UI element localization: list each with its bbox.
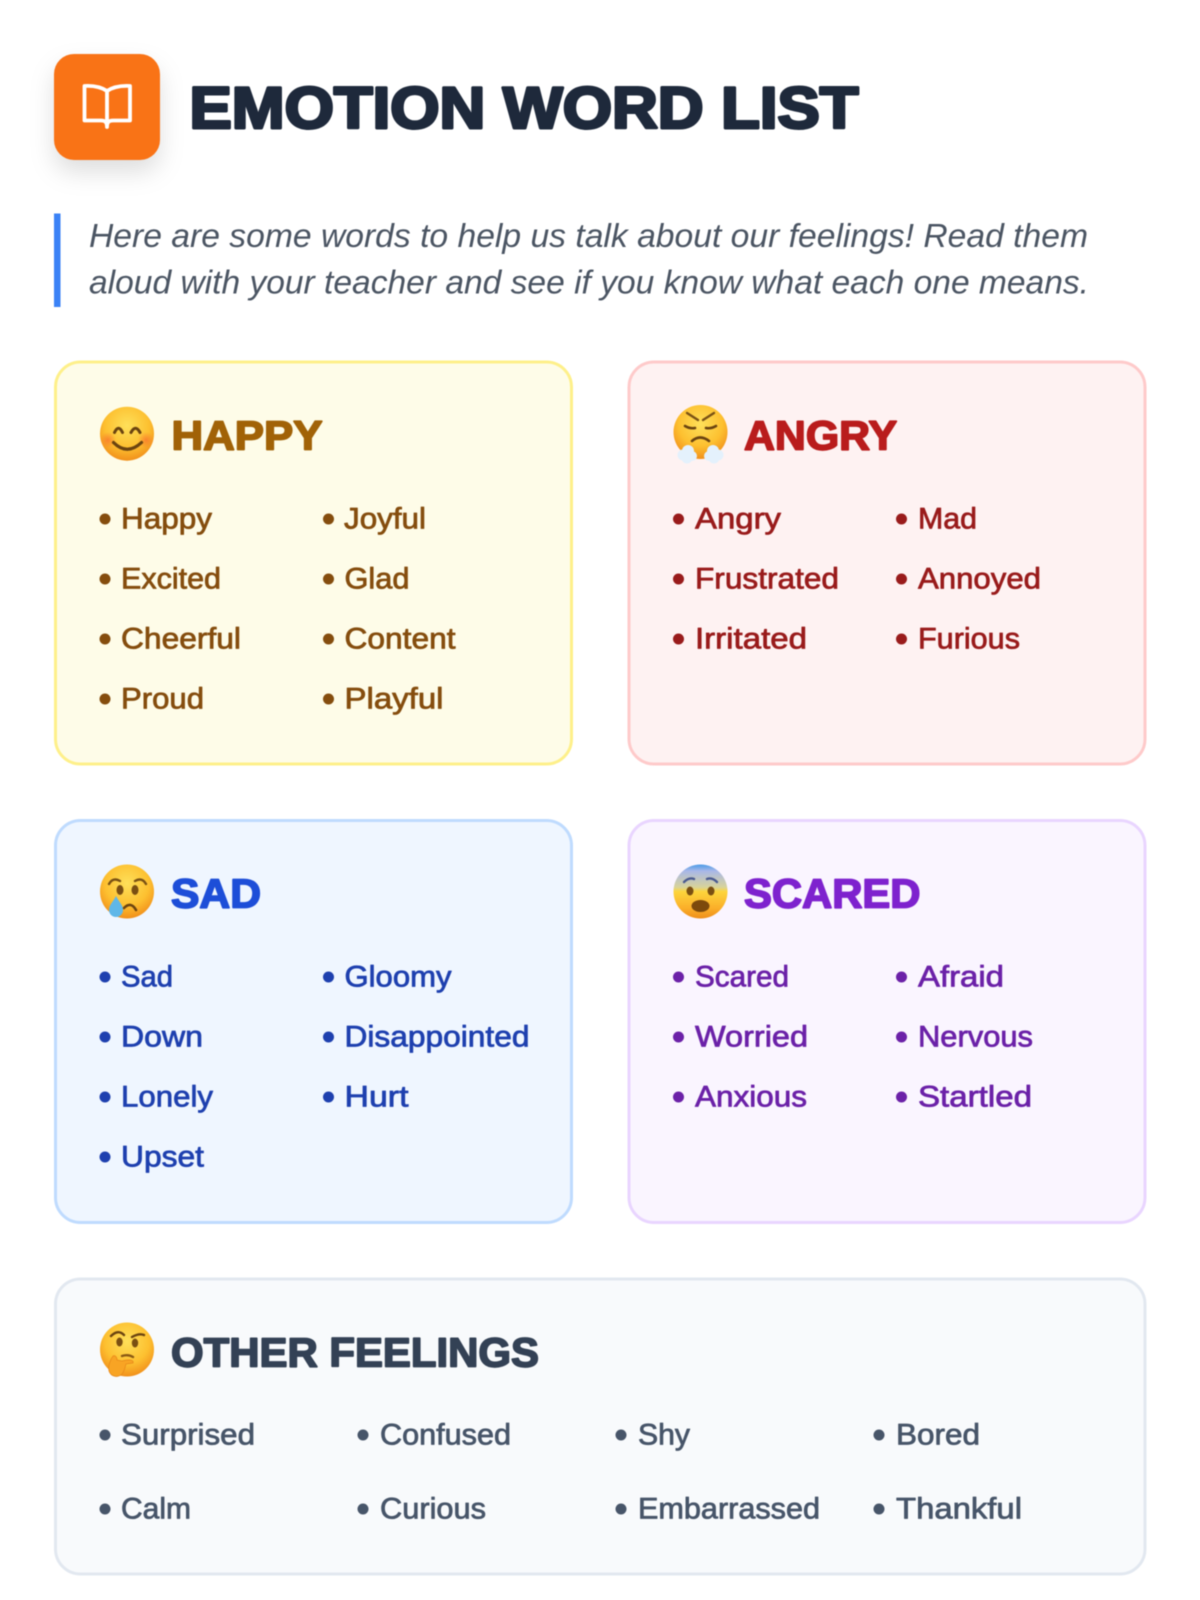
panel: happy bbox=[56, 362, 572, 764]
heading: other feelings: OTHER FEELINGS bbox=[171, 1330, 539, 1376]
word list: other feelings: Bored bbox=[896, 1418, 980, 1452]
icon: crying face emoji bbox=[100, 864, 154, 918]
word list: other feelings: Curious bbox=[380, 1492, 486, 1526]
panel: sad bbox=[56, 820, 572, 1222]
word list: happy: Cheerful bbox=[121, 622, 241, 656]
word list: angry: Angry bbox=[695, 502, 781, 536]
intro text block: Here are some words to help us talk about our feelings! Read them bbox=[89, 218, 1088, 255]
word list: angry: Furious bbox=[918, 622, 1020, 656]
panel: other feelings bbox=[56, 1279, 1145, 1574]
word list: happy: Joyful bbox=[344, 502, 426, 536]
word list: scared: Afraid bbox=[918, 960, 1004, 994]
panel: scared bbox=[629, 820, 1145, 1222]
word list: angry: Frustrated bbox=[695, 562, 839, 596]
icon: open book badge bbox=[54, 54, 160, 160]
title: EMOTION WORD LIST bbox=[190, 76, 858, 141]
word list: happy: Glad bbox=[344, 562, 410, 596]
word list: angry: Annoyed bbox=[918, 562, 1041, 596]
word list: other feelings: Embarrassed bbox=[638, 1492, 820, 1526]
word list: sad: Upset bbox=[121, 1140, 204, 1174]
word list: other feelings: Calm bbox=[121, 1492, 191, 1526]
word list: sad: Down bbox=[121, 1020, 203, 1054]
heading: scared: SCARED bbox=[744, 870, 920, 916]
word list: scared: Scared bbox=[695, 960, 789, 994]
heading: angry: ANGRY bbox=[744, 412, 897, 458]
word list: happy: Excited bbox=[121, 562, 221, 596]
word list: happy: Proud bbox=[121, 682, 204, 716]
word list: other feelings: Shy bbox=[638, 1418, 690, 1452]
word list: happy bbox=[100, 502, 456, 716]
icon: fearful face emoji bbox=[674, 864, 728, 918]
word list: happy: Content bbox=[344, 622, 456, 656]
word list: angry bbox=[673, 502, 1041, 656]
word list: sad: Sad bbox=[121, 960, 173, 994]
word list: other feelings: Confused bbox=[380, 1418, 511, 1452]
word list: sad: Disappointed bbox=[344, 1020, 530, 1054]
panel: angry bbox=[629, 362, 1145, 764]
word list: happy: Happy bbox=[121, 502, 212, 536]
word list: sad: Hurt bbox=[344, 1080, 408, 1114]
word list: sad: Lonely bbox=[121, 1080, 213, 1114]
intro text block bbox=[54, 214, 1089, 307]
icon: thinking face emoji bbox=[100, 1322, 154, 1376]
icon: huffing face emoji bbox=[674, 405, 728, 464]
word list: scared bbox=[673, 960, 1033, 1114]
word list: happy: Playful bbox=[344, 682, 444, 716]
word list: scared: Anxious bbox=[695, 1080, 807, 1114]
word list: other feelings: Thankful bbox=[896, 1492, 1022, 1526]
heading: sad: SAD bbox=[171, 870, 261, 916]
intro text block: aloud with your teacher and see if you know what each one means. bbox=[89, 264, 1089, 302]
word list: scared: Nervous bbox=[918, 1020, 1033, 1054]
word list: other feelings: Surprised bbox=[121, 1418, 255, 1452]
word list: scared: Startled bbox=[918, 1080, 1032, 1114]
word list: scared: Worried bbox=[695, 1020, 808, 1054]
icon: smiling face emoji bbox=[100, 407, 154, 461]
word list: angry: Mad bbox=[918, 502, 977, 536]
word list: sad: Gloomy bbox=[344, 960, 452, 994]
heading: happy: HAPPY bbox=[172, 412, 322, 458]
word list: angry: Irritated bbox=[695, 622, 807, 656]
word list: other feelings bbox=[100, 1418, 1022, 1526]
word list: sad bbox=[100, 960, 530, 1174]
